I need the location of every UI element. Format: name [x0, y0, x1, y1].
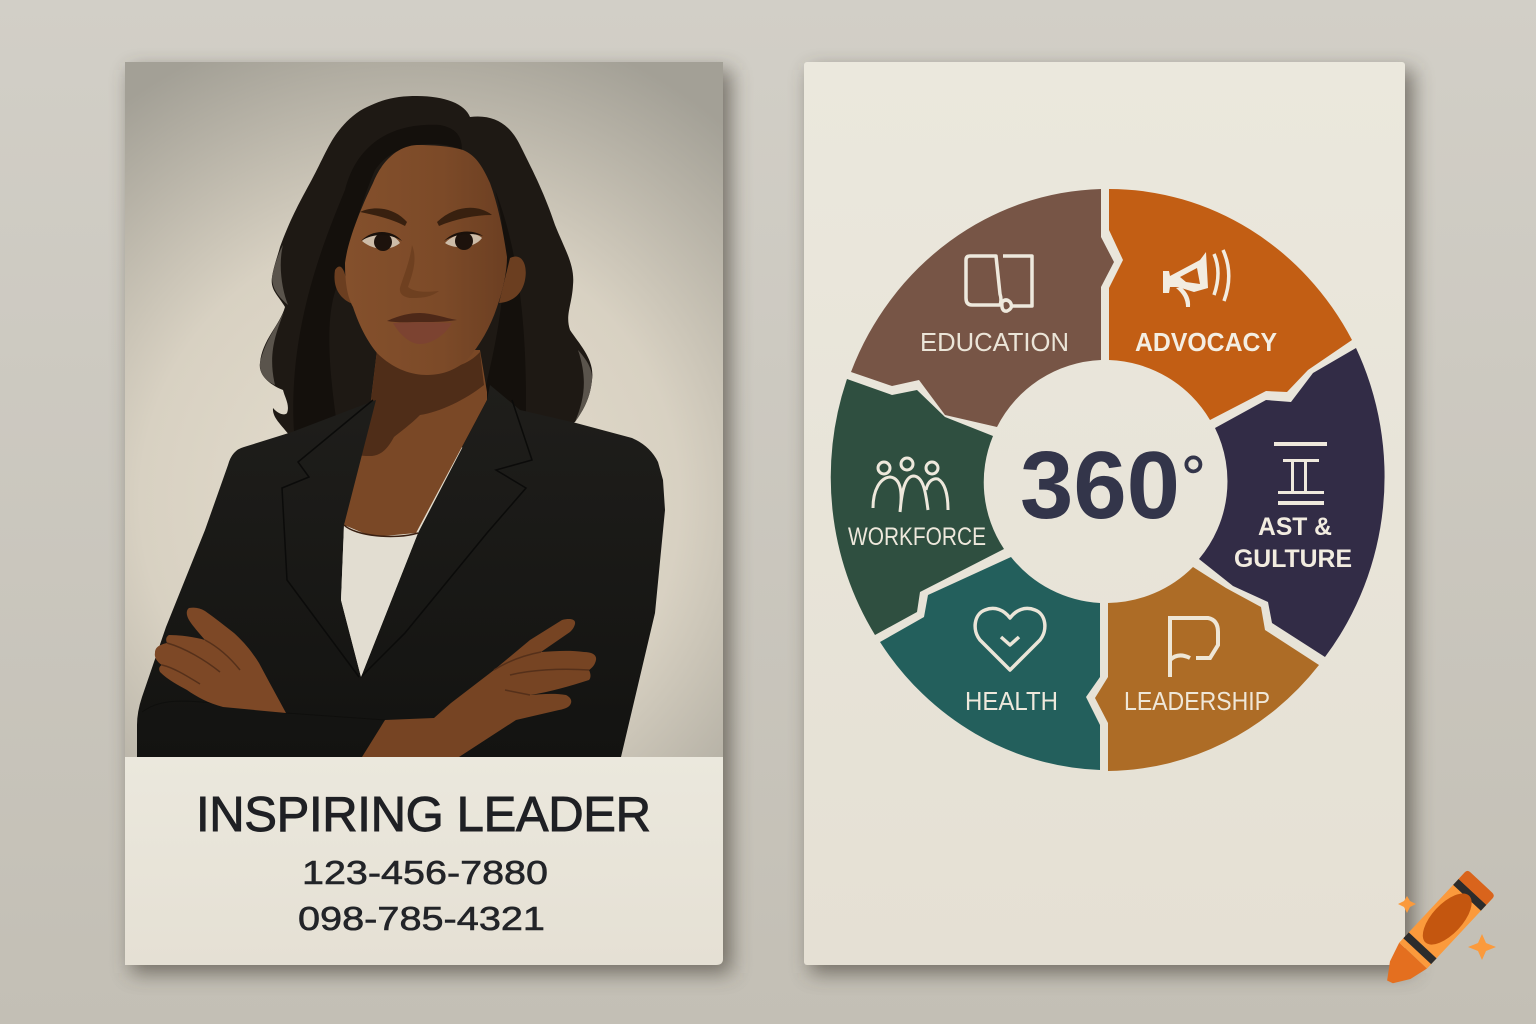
panel: wheel card [804, 62, 1405, 965]
icon: columns [1274, 442, 1327, 505]
icon: megaphone [1163, 250, 1229, 307]
portrait background [125, 62, 723, 758]
icon: heart [975, 608, 1045, 670]
icon: leadership flag [1170, 618, 1218, 677]
label: art and culture: AST & [1258, 513, 1332, 541]
icon: book [966, 256, 1032, 311]
label: leadership: LEADERSHIP [1124, 686, 1270, 716]
panel: portrait card [125, 62, 723, 965]
phone number 1: 123-456-7880 [302, 854, 548, 891]
name plate [125, 757, 723, 965]
center degree sign: ° [1181, 444, 1206, 513]
label: health: HEALTH [965, 686, 1058, 716]
segment: advocacy [1109, 189, 1352, 420]
segment: art and culture [1199, 348, 1385, 657]
label: workforce: WORKFORCE [848, 523, 986, 551]
phone number 2: 098-785-4321 [298, 900, 545, 937]
label: education: EDUCATION [920, 327, 1069, 357]
segment: health [880, 557, 1100, 770]
icon: people [873, 458, 948, 512]
wheel chart [831, 189, 1385, 771]
center value: 360 [1020, 432, 1180, 539]
segment: education [851, 189, 1114, 427]
segment: workforce [831, 379, 1004, 635]
portrait illustration [137, 96, 665, 757]
segment: leadership [1095, 567, 1319, 771]
label: advocacy: ADVOCACY [1135, 327, 1277, 357]
icon: crayon logo [1375, 870, 1496, 995]
name heading: INSPIRING LEADER [196, 788, 651, 842]
label: culture line: GULTURE [1234, 545, 1352, 573]
card background [804, 62, 1405, 965]
